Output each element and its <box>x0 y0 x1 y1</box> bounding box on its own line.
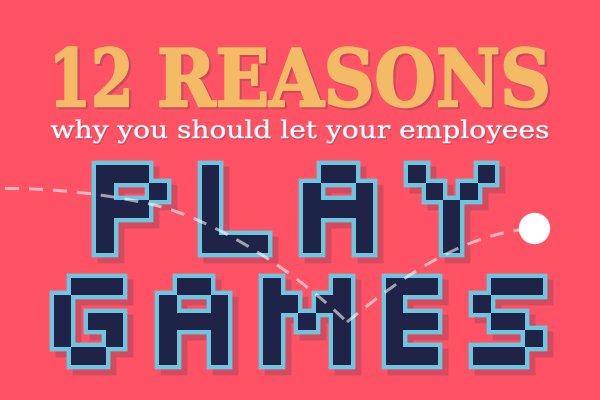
subtitle: why you should let your employees <box>50 116 550 144</box>
title: 12 REASONS: REASONS <box>159 34 553 127</box>
letter A <box>303 165 379 259</box>
letter Y <box>408 165 501 259</box>
letter S <box>473 278 549 371</box>
subtitle: why you should let your employees <box>52 118 550 146</box>
letter P <box>96 165 173 259</box>
letter A <box>159 278 234 371</box>
letter E <box>386 278 444 371</box>
icon: white ball <box>519 213 550 244</box>
title: 12 REASONS: 12 <box>51 34 136 127</box>
title: 12 REASONS: REASONS <box>157 32 551 125</box>
dashed ball trajectory <box>5 188 519 322</box>
letter M <box>263 278 357 371</box>
pixel word: GAMES <box>54 274 549 399</box>
pixel word: PLAY <box>96 162 501 287</box>
title: 12 REASONS: 12 <box>48 32 134 125</box>
letter L <box>202 165 274 259</box>
letter G <box>54 278 129 371</box>
